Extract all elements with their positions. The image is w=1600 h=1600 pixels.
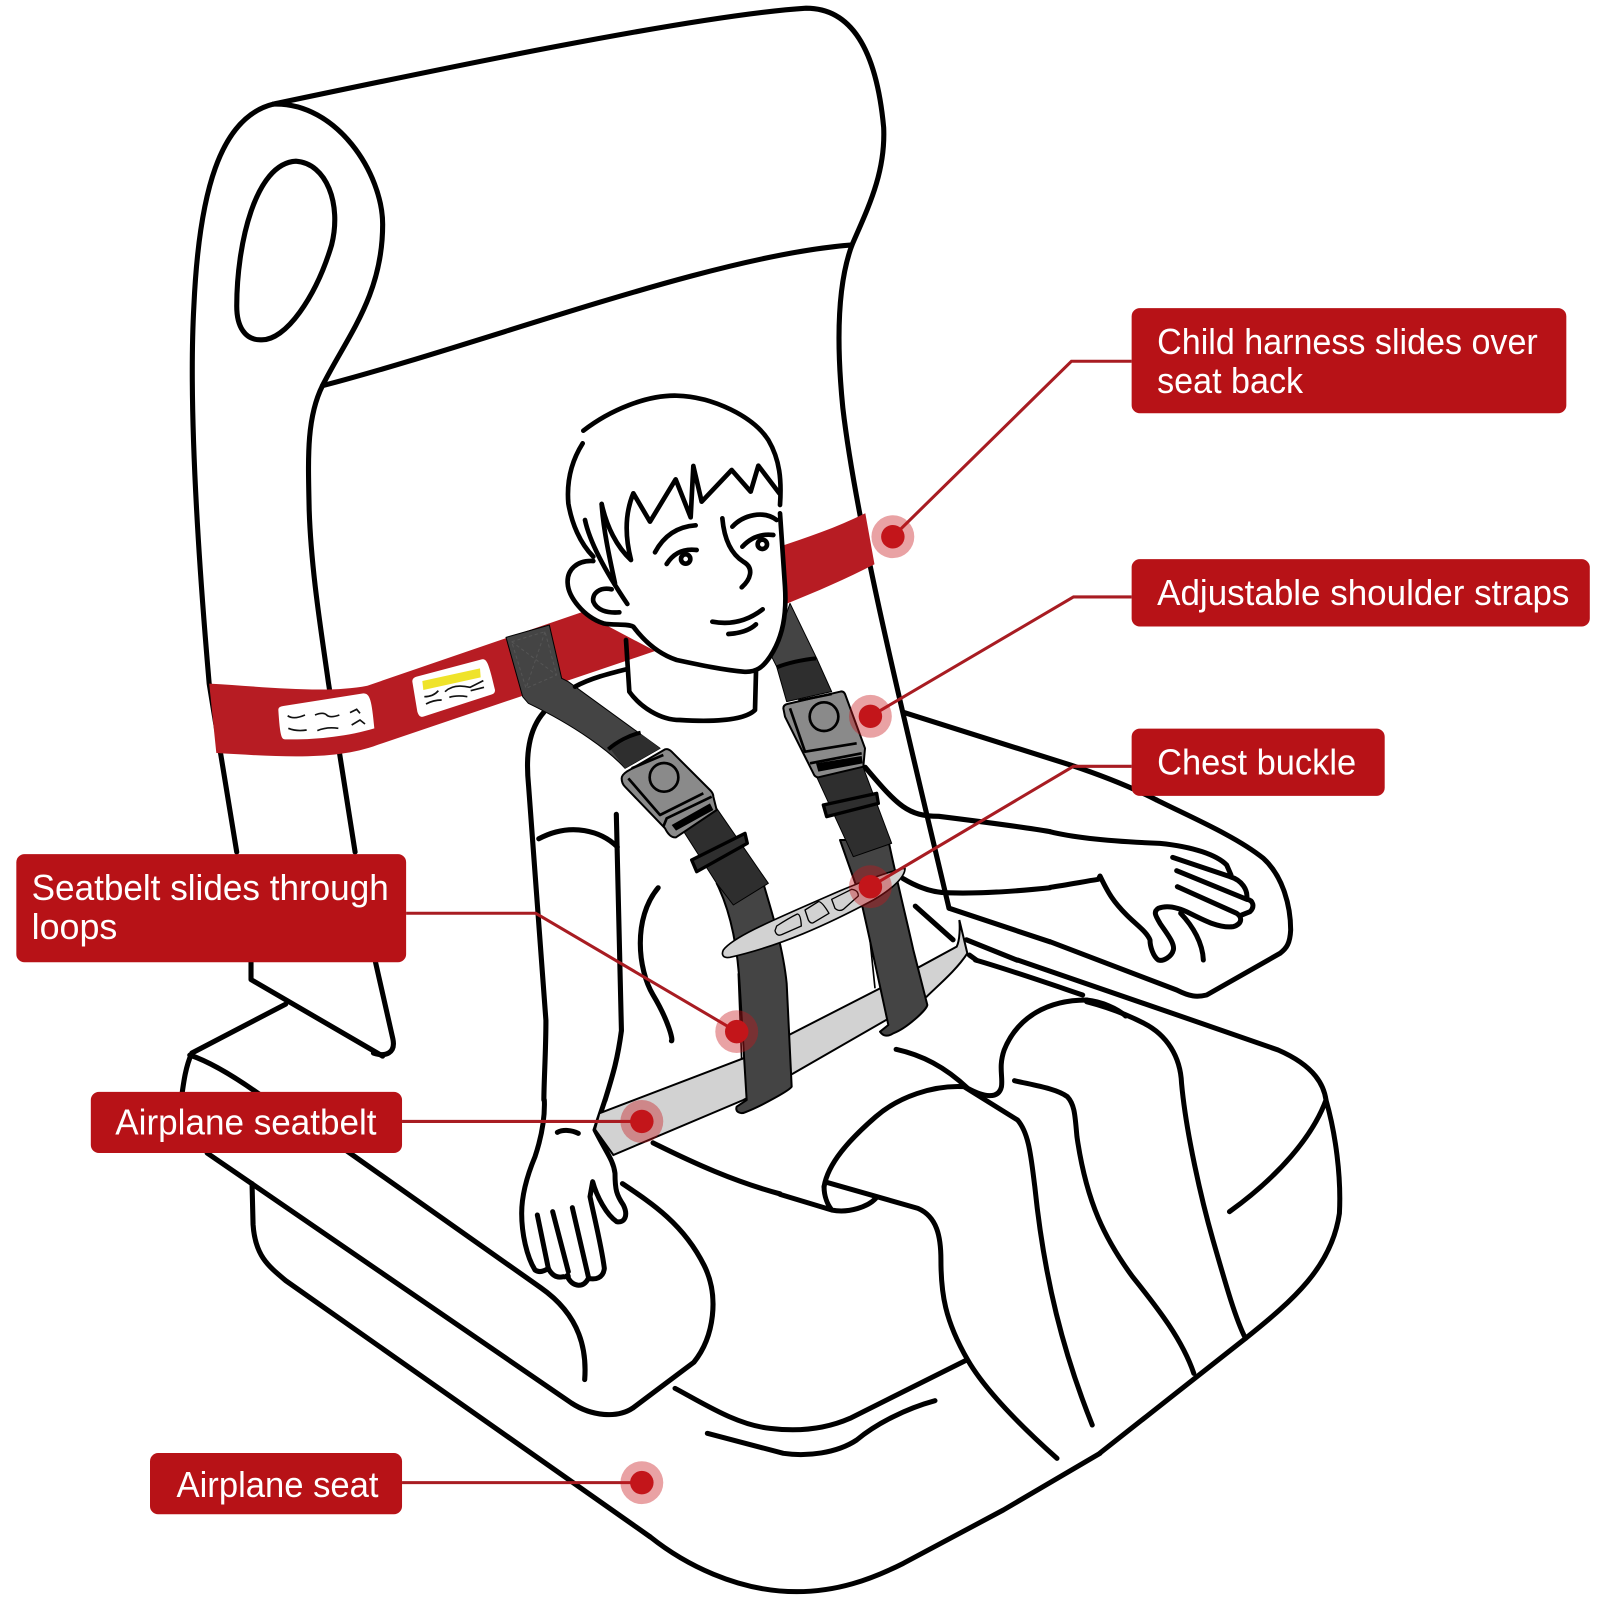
chest buckle bbox=[722, 868, 905, 958]
boy head bbox=[568, 396, 785, 721]
seat cushion and boy legs bbox=[780, 960, 1340, 1458]
leader line: chest buckle bbox=[849, 766, 1132, 908]
label: airplane seat bbox=[150, 1453, 402, 1514]
red harness band bbox=[209, 513, 874, 756]
boy body and clothes bbox=[528, 712, 1050, 1100]
label: shoulder straps: Adjustable shoulder straps bbox=[1157, 573, 1569, 613]
right armrest and hand bbox=[1050, 800, 1291, 996]
label: child harness bbox=[1132, 308, 1566, 413]
label: chest buckle bbox=[1132, 729, 1385, 796]
label: chest buckle: Chest buckle bbox=[1157, 742, 1356, 782]
leader line: seatbelt loops bbox=[406, 913, 758, 1053]
label: seatbelt loops: Seatbelt slides through bbox=[32, 868, 389, 908]
lower harness straps bbox=[717, 840, 927, 1113]
airplane seat outline bbox=[180, 8, 1157, 1537]
leader line: child harness bbox=[871, 361, 1132, 558]
seatbelt bbox=[595, 840, 967, 1155]
leader line: airplane seatbelt bbox=[402, 1100, 663, 1143]
left hand bbox=[522, 1100, 626, 1285]
leader line: shoulder straps bbox=[849, 597, 1132, 738]
label: seatbelt loops bbox=[16, 854, 406, 962]
leader line: airplane seat bbox=[402, 1461, 663, 1504]
seat bottom front edge and cushion creases bbox=[650, 1360, 1100, 1592]
right shoulder strap bbox=[772, 603, 892, 857]
boy neck fill bbox=[628, 652, 756, 721]
label: child harness: Child harness slides over bbox=[1157, 322, 1538, 362]
label: child harness: seat back bbox=[1157, 361, 1303, 401]
label: shoulder straps bbox=[1132, 559, 1590, 627]
label: airplane seat: Airplane seat bbox=[177, 1465, 379, 1505]
label: airplane seatbelt: Airplane seatbelt bbox=[115, 1103, 377, 1143]
label tags on band bbox=[278, 659, 495, 739]
label: airplane seatbelt bbox=[91, 1092, 402, 1153]
label: seatbelt loops: loops bbox=[32, 907, 117, 947]
left shoulder strap bbox=[506, 625, 768, 905]
upper straps and boy head bbox=[506, 396, 892, 905]
